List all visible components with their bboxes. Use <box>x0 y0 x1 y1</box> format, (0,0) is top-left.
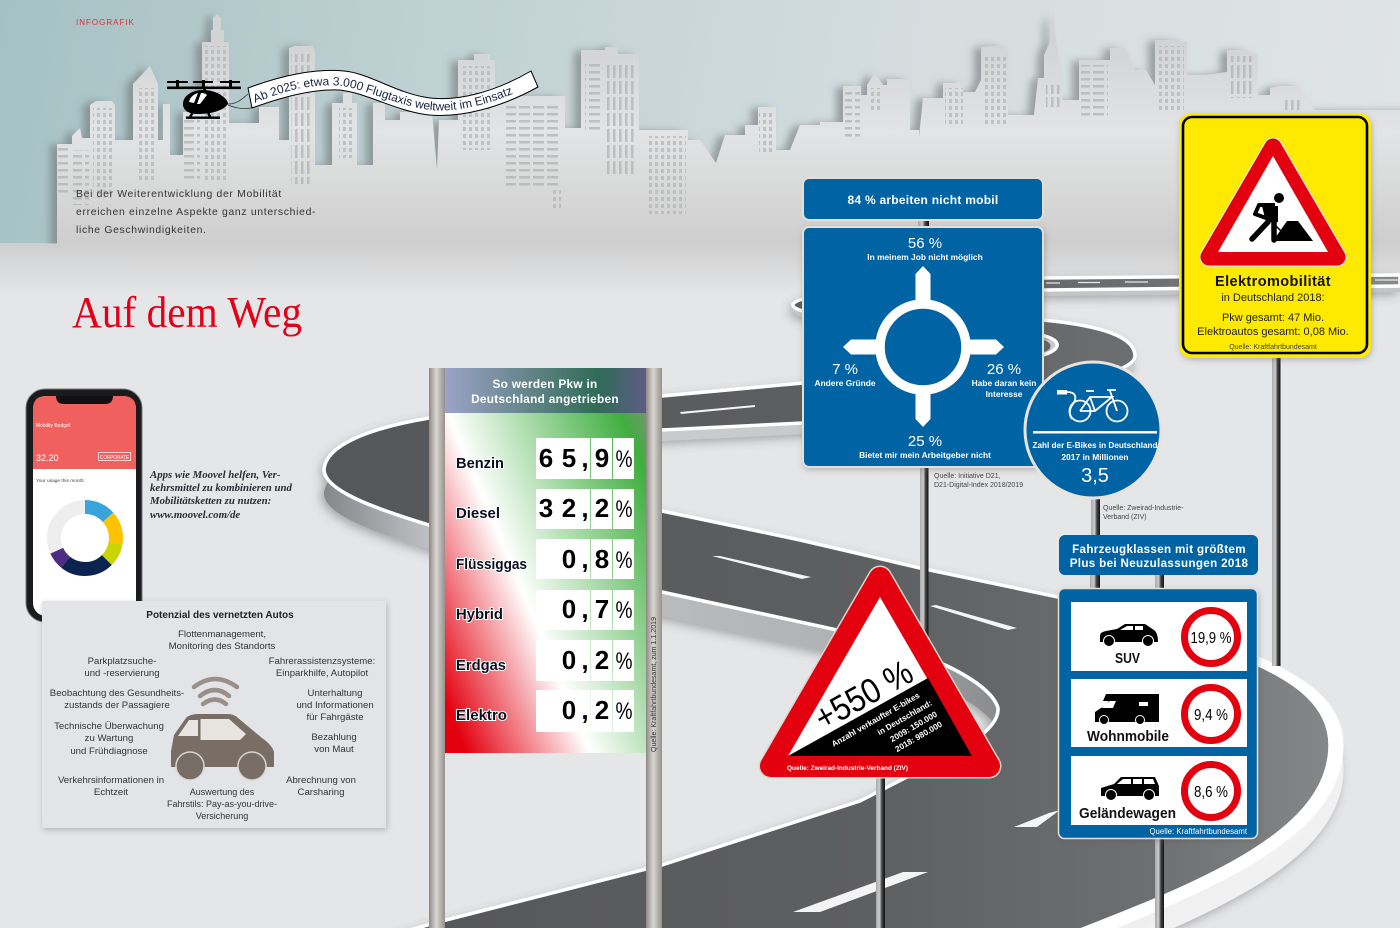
row: Elektro <box>456 690 634 732</box>
row: Hybrid <box>456 590 634 630</box>
panel: connected car: und -reservierung <box>84 668 160 679</box>
row: Flüssiggas <box>456 539 634 579</box>
caption: Moovel: kehrsmittel zu kombinieren und <box>150 482 292 494</box>
panel: connected car: Bezahlung <box>311 732 357 743</box>
row: SUV: SUV <box>1115 650 1140 667</box>
row: Diesel: 32,2 <box>539 493 609 523</box>
row: Elektro: Elektro <box>456 708 507 724</box>
sign: roundabout: Bietet mir mein Arbeitgeber nicht <box>859 450 991 460</box>
chart: usage donut <box>54 507 116 569</box>
sign: e-bikes circle: Zahl der E-Bikes in Deutschland <box>1032 441 1158 450</box>
row: Elektro: 0,2 <box>562 695 609 725</box>
panel: connected car: Verkehrsinformationen in <box>58 775 164 786</box>
source: fuel types: Quelle: Kraftfahrtbundesamt, zum 1.1.2019 <box>651 617 658 752</box>
sign: vehicle classes header: Plus bei Neuzulassungen 2018 <box>1070 557 1249 570</box>
sign: 84 percent header: 84 % arbeiten nicht mobil <box>848 193 998 207</box>
sign: yellow electromobility: Elektromobilität <box>1215 274 1331 290</box>
row: Diesel: % <box>616 496 632 523</box>
header: fuel types: Deutschland angetrieben <box>471 392 619 406</box>
panel: connected car: Technische Überwachung <box>54 721 164 732</box>
panel: connected car: Einparkhilfe, Autopilot <box>276 668 368 679</box>
panel: connected car: Auswertung des <box>190 787 255 797</box>
air taxi with banner <box>167 70 539 119</box>
panel: connected car: für Fahrgäste <box>306 712 364 723</box>
sign: e-bikes circle: 3,5 <box>1081 465 1109 487</box>
lane markings <box>680 405 1060 912</box>
panel: connected car: Flottenmanagement, <box>178 629 266 640</box>
row: Diesel <box>456 489 634 529</box>
source: D21: Quelle: Initiative D21, <box>934 473 1001 480</box>
intro text: liche Geschwindigkeiten. <box>76 225 207 236</box>
sign: yellow electromobility: Pkw gesamt: 47 Mio. <box>1222 312 1324 324</box>
caption: Moovel: Mobilitätsketten zu nutzen: <box>149 495 271 507</box>
header: fuel types <box>445 368 646 413</box>
panel: fuel types <box>429 368 662 928</box>
road <box>324 275 1400 928</box>
sign: 84 percent header <box>803 178 1043 220</box>
source: ZIV: Verband (ZIV) <box>1103 514 1147 521</box>
sign: roundabout: 26 % <box>987 361 1021 378</box>
sign: vehicle classes header <box>1059 535 1258 575</box>
sign: yellow electromobility: Elektroautos gesamt: 0,08 Mio. <box>1197 326 1349 338</box>
sign: +550 percent triangle: Quelle: Zweirad-Industrie-Verband (ZIV) <box>787 765 908 772</box>
row: Wohnmobile <box>1071 679 1247 747</box>
row: Benzin: 65,9 <box>539 443 609 473</box>
header: fuel types: So werden Pkw in <box>492 377 598 391</box>
row: Geländewagen: 8,6 % <box>1194 784 1228 801</box>
skyline <box>57 13 1400 260</box>
row: Flüssiggas: 0,8 <box>562 544 609 574</box>
panel: connected car: Echtzeit <box>94 787 128 798</box>
panel: connected car: Beobachtung des Gesundheits- <box>50 688 184 699</box>
row: Wohnmobile: 9,4 % <box>1194 707 1228 724</box>
row: SUV <box>1071 602 1247 671</box>
row: Hybrid: 0,7 <box>562 594 609 624</box>
sign: +550 percent triangle <box>771 578 989 772</box>
sign: vehicle classes: Quelle: Kraftfahrtbundesamt <box>1149 827 1248 836</box>
phone: Mobility Budget <box>36 423 71 429</box>
sign: yellow electromobility <box>1179 113 1371 358</box>
phone <box>26 389 142 622</box>
icon: road works triangle <box>1209 147 1337 257</box>
sign: +550 percent triangle: 2009: 150.000 <box>889 710 939 744</box>
sign: +550 percent triangle: 2018: 980.000 <box>894 720 944 754</box>
row: Hybrid: % <box>616 597 632 624</box>
sign: vehicle classes <box>1058 588 1258 838</box>
intro text: erreichen einzelne Aspekte ganz unterschied- <box>76 207 316 218</box>
row: Erdgas <box>456 640 634 681</box>
panel: connected car: Abrechnung von <box>286 775 356 786</box>
sign: roundabout: 25 % <box>908 433 942 450</box>
sign: roundabout: 56 % <box>908 235 942 252</box>
sign: roundabout: Interesse <box>986 389 1023 399</box>
sign: roundabout <box>803 227 1043 467</box>
panel: connected car: Fahrerassistenzsysteme: <box>269 656 375 667</box>
icon: air taxi <box>167 80 254 119</box>
sign: e-bikes circle <box>1025 362 1161 498</box>
sign: +550 percent triangle: in Deutschland: <box>876 699 934 737</box>
sign: roundabout: 7 % <box>832 361 858 378</box>
sign: e-bikes circle: 2017 in Millionen <box>1061 452 1129 462</box>
banner: Ab 2025: etwa 3.000 Flugtaxis weltweit im Einsatz <box>254 77 513 110</box>
sign: yellow electromobility: Quelle: Kraftfahrtbundesamt <box>1229 344 1317 351</box>
icon: e-bike <box>1057 390 1128 422</box>
row: Geländewagen: Geländewagen <box>1079 805 1176 822</box>
intro text: Bei der Weiterentwicklung der Mobilität <box>76 189 282 200</box>
source: ZIV: Quelle: Zweirad-Industrie- <box>1103 505 1184 512</box>
row: Hybrid: Hybrid <box>456 607 503 623</box>
panel: connected car: Fahrstils: Pay-as-you-drive- <box>167 799 277 809</box>
sign: roundabout: Habe daran kein <box>972 378 1036 388</box>
row: Benzin <box>456 438 634 479</box>
sign: roundabout: Andere Gründe <box>815 378 876 388</box>
icon: connected car <box>171 679 274 780</box>
row: Geländewagen <box>1071 756 1247 825</box>
panel: connected car: Parkplatzsuche- <box>88 656 156 667</box>
panel: connected car: und Frühdiagnose <box>70 746 148 757</box>
phone: CORPORATE <box>100 455 129 461</box>
sign: yellow electromobility: in Deutschland 2018: <box>1221 292 1325 304</box>
panel: connected car: Potenzial des vernetzten Autos <box>146 610 294 621</box>
sign: vehicle classes header: Fahrzeugklassen mit größtem <box>1072 543 1246 556</box>
panel: connected car: Versicherung <box>196 811 248 821</box>
sign: roundabout: In meinem Job nicht möglich <box>867 252 983 262</box>
phone: Your usage this month: <box>36 478 85 484</box>
icon: roundabout <box>843 266 1004 427</box>
source: D21: D21-Digital-Index 2018/2019 <box>934 482 1023 489</box>
panel: connected car: Carsharing <box>298 787 344 798</box>
panel: connected car: von Maut <box>314 744 354 755</box>
panel: connected car: Monitoring des Standorts <box>169 641 276 652</box>
caption: Moovel: Apps wie Moovel helfen, Ver- <box>149 469 281 481</box>
panel: connected car: und Informationen <box>296 700 374 711</box>
row: Erdgas: % <box>616 648 632 675</box>
label: infografik: INFOGRAFIK <box>76 18 135 27</box>
panel: connected car: Unterhaltung <box>308 688 362 699</box>
sign: +550 percent triangle: Anzahl verkaufter E-bikes <box>830 691 922 749</box>
row: Benzin: Benzin <box>456 456 504 472</box>
row: Diesel: Diesel <box>456 506 500 522</box>
row: Erdgas: 0,2 <box>562 645 609 675</box>
row: Erdgas: Erdgas <box>456 658 506 674</box>
panel: connected car <box>42 601 386 828</box>
poles <box>876 220 1280 928</box>
row: Elektro: % <box>616 698 632 725</box>
caption: Moovel: www.moovel.com/de <box>150 509 240 521</box>
row: Flüssiggas: % <box>616 547 632 574</box>
row: Wohnmobile: Wohnmobile <box>1087 728 1169 745</box>
sign: +550 percent triangle: +550 % <box>808 652 920 738</box>
panel: connected car: zu Wartung <box>85 733 133 744</box>
title: Auf dem Weg <box>72 288 302 337</box>
row: SUV: 19,9 % <box>1190 630 1232 647</box>
panel: connected car: zustands der Passagiere <box>64 700 170 711</box>
row: Benzin: % <box>616 446 632 473</box>
phone: 32.20 <box>36 453 59 463</box>
row: Flüssiggas: Flüssiggas <box>456 557 527 573</box>
